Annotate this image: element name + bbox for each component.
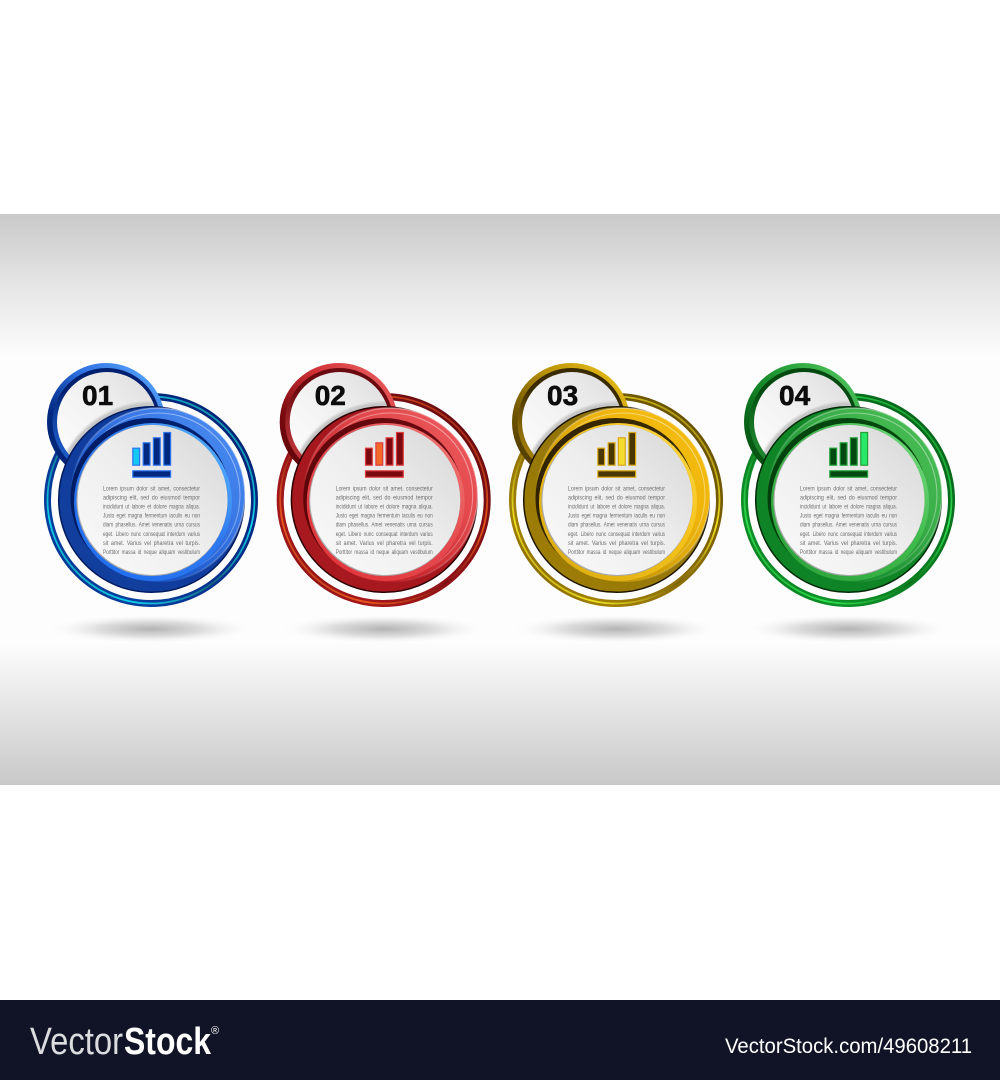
body text: eget. Libero nunc consequat interdum varius — [336, 531, 433, 538]
body text: adipiscing elit, sed do eiusmod tempor — [568, 495, 665, 502]
main ring — [59, 407, 245, 592]
body text: Lorem ipsum dolor sit amet, consectetur — [103, 486, 200, 492]
body text: eget. Libero nunc consequat interdum varius — [800, 531, 897, 538]
outer ring — [48, 396, 254, 604]
background band — [0, 214, 1000, 785]
main ring — [291, 407, 478, 592]
body text: diam phasellus. Amet venenatis urna cursus — [800, 522, 897, 529]
logo wordmark — [30, 1021, 219, 1063]
icon: bar chart — [366, 432, 403, 477]
icon: bar chart — [598, 432, 636, 477]
body text: diam phasellus. Amet venenatis urna cursus — [103, 522, 200, 529]
number: 02 — [315, 380, 346, 411]
body text: sit amet. Varius vel pharetra vel turpis. — [800, 540, 897, 547]
body text: Lorem ipsum dolor sit amet, consectetur — [568, 486, 665, 492]
content disc — [541, 425, 693, 576]
content disc — [773, 425, 925, 576]
outer ring — [512, 396, 720, 604]
body text: Porttitor massa id neque aliquam vestibulum — [568, 549, 665, 556]
body text: diam phasellus. Amet venenatis urna cursus — [336, 522, 433, 529]
number: 03 — [547, 380, 578, 411]
body text: eget. Libero nunc consequat interdum varius — [568, 531, 665, 538]
content disc — [76, 425, 228, 576]
image id: VectorStock.com/49608211 — [725, 1035, 972, 1058]
panel: step 01 blue — [45, 363, 257, 644]
footer bar — [0, 1000, 1000, 1080]
body text: Justo eget magna fermentum iaculis eu non — [568, 513, 665, 520]
number tab — [280, 363, 396, 464]
number tab — [744, 363, 860, 464]
icon: bar chart — [830, 432, 868, 477]
panel: step 02 red — [278, 363, 490, 644]
logo wordmark: ® — [211, 1025, 219, 1037]
body text: eget. Libero nunc consequat interdum varius — [103, 531, 200, 538]
body text — [568, 486, 665, 556]
number tab — [512, 363, 628, 464]
number tab — [47, 363, 163, 464]
body text: incididunt ut labore et dolore magna aliqua. — [336, 504, 433, 511]
body text — [336, 486, 433, 556]
panel: step 03 gold — [510, 363, 722, 644]
body text: diam phasellus. Amet venenatis urna cursus — [568, 522, 665, 529]
outer ring — [744, 396, 952, 604]
body text — [103, 486, 200, 556]
main ring — [524, 407, 710, 592]
number: 04 — [779, 380, 811, 411]
icon: bar chart — [133, 432, 171, 477]
body text: sit amet. Varius vel pharetra vel turpis. — [568, 540, 665, 547]
body text: Justo eget magna fermentum iaculis eu non — [336, 513, 433, 520]
logo wordmark: Vector — [30, 1021, 123, 1063]
logo wordmark: Stock — [124, 1021, 212, 1063]
body text: Lorem ipsum dolor sit amet, consectetur — [800, 486, 897, 492]
floor shadow — [45, 614, 257, 644]
body text: sit amet. Varius vel pharetra vel turpis. — [336, 540, 433, 547]
body text: Porttitor massa id neque aliquam vestibulum — [800, 549, 897, 556]
body text — [800, 486, 897, 556]
floor shadow — [742, 614, 954, 644]
body text: Porttitor massa id neque aliquam vestibulum — [103, 549, 200, 556]
floor shadow — [510, 614, 722, 644]
body text: adipiscing elit, sed do eiusmod tempor — [336, 495, 433, 502]
body text: Justo eget magna fermentum iaculis eu non — [800, 513, 897, 520]
body text: Lorem ipsum dolor sit amet, consectetur — [336, 486, 433, 492]
content disc — [309, 425, 460, 576]
panel: step 04 green — [742, 363, 954, 644]
body text: adipiscing elit, sed do eiusmod tempor — [103, 495, 200, 502]
body text: incididunt ut labore et dolore magna aliqua. — [103, 504, 200, 511]
body text: sit amet. Varius vel pharetra vel turpis. — [103, 540, 200, 547]
floor shadow — [278, 614, 490, 644]
body text: incididunt ut labore et dolore magna aliqua. — [568, 504, 665, 511]
body text: Justo eget magna fermentum iaculis eu non — [103, 513, 200, 520]
body text: Porttitor massa id neque aliquam vestibulum — [336, 549, 433, 556]
body text: adipiscing elit, sed do eiusmod tempor — [800, 495, 897, 502]
number: 01 — [82, 380, 113, 411]
outer ring — [280, 396, 487, 604]
main ring — [756, 407, 942, 592]
body text: incididunt ut labore et dolore magna aliqua. — [800, 504, 897, 511]
